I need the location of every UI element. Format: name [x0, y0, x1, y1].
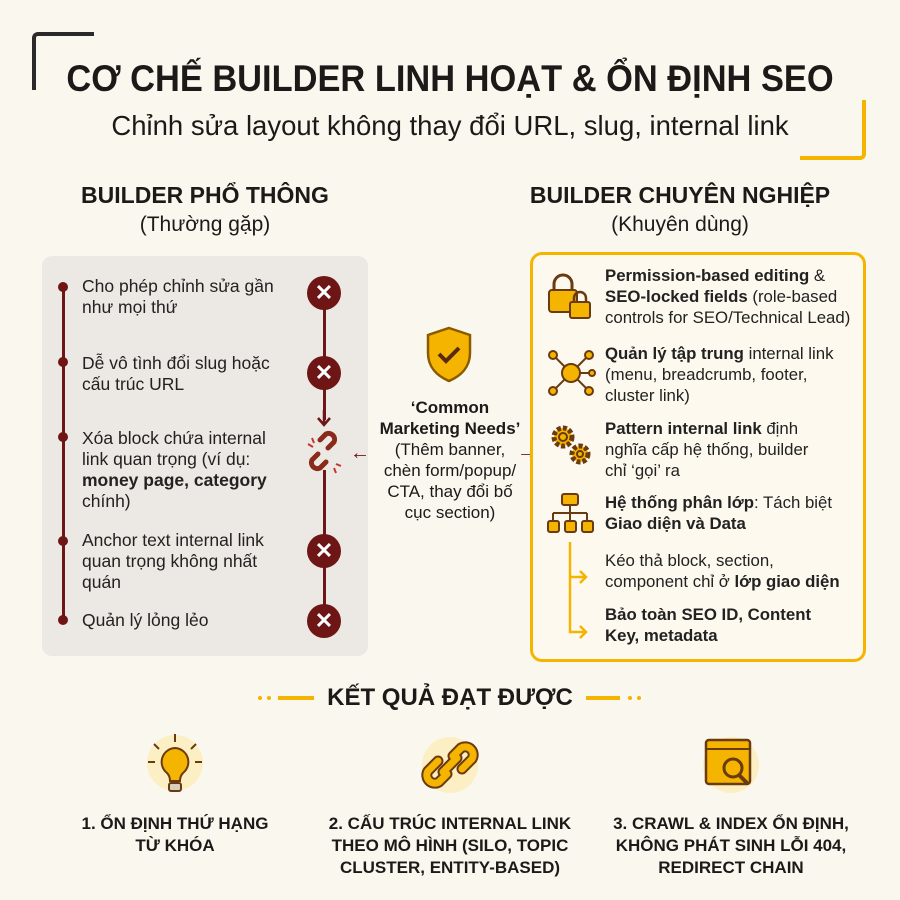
arrow left: ← — [350, 442, 370, 464]
text: Key, metadata — [605, 626, 718, 645]
text: Quản lý tập trung internal link — [605, 344, 833, 363]
left items: quán — [82, 572, 121, 592]
section heading: ket qua: KẾT QUẢ ĐẠT ĐƯỢC — [327, 684, 573, 711]
result 2 — [329, 737, 571, 877]
icon: hierarchy — [547, 493, 594, 533]
timeline line — [62, 285, 65, 621]
x icons column: ✕ — [315, 360, 333, 385]
left items: Cho phép chỉnh sửa gần — [82, 276, 274, 296]
panel: builder chuyen nghiep — [530, 252, 866, 662]
icon: bulb — [147, 734, 203, 792]
result 2: CLUSTER, ENTITY-BASED) — [340, 858, 560, 877]
left items: quan trọng không nhất — [82, 551, 257, 571]
x icons column — [307, 276, 342, 638]
left items: Dễ vô tình đổi slug hoặc — [82, 353, 270, 373]
result 1: TỪ KHÓA — [135, 836, 215, 855]
corner bracket bottom-right — [800, 100, 866, 160]
left items: link quan trọng (ví dụ: — [82, 449, 250, 469]
icon: chain link — [421, 737, 479, 793]
text: Permission-based editing & — [605, 266, 825, 285]
left items: Anchor text internal link — [82, 530, 264, 550]
icon: locks — [548, 274, 591, 319]
result 2: 2. CẤU TRÚC INTERNAL LINK — [329, 814, 571, 833]
corner bracket top-left — [32, 32, 94, 90]
connector arrows — [568, 542, 588, 639]
center text: common marketing needs: cục section) — [405, 503, 495, 522]
center text: common marketing needs — [380, 398, 520, 522]
left items: Quản lý lỏng lẻo — [82, 610, 208, 630]
center text: common marketing needs: CTA, thay đổi bố — [387, 482, 513, 501]
left items — [58, 276, 274, 630]
text: Pattern internal link định — [605, 419, 798, 438]
result 1: 1. ỔN ĐỊNH THỨ HẠNG — [82, 814, 268, 833]
icon: browser search — [703, 737, 759, 793]
x icons column: ✕ — [315, 538, 333, 563]
heading right: BUILDER CHUYÊN NGHIỆP — [530, 182, 830, 208]
result 3 — [613, 737, 849, 877]
text: Hệ thống phân lớp: Tách biệt — [605, 493, 832, 512]
center text: common marketing needs: (Thêm banner, — [395, 440, 505, 459]
left items: như mọi thứ — [82, 297, 177, 317]
text: controls for SEO/Technical Lead) — [605, 308, 850, 327]
heading left: BUILDER PHỔ THÔNG — [81, 182, 329, 208]
subtitle: Chỉnh sửa layout không thay đổi URL, slug, internal link — [111, 110, 789, 141]
text: chỉ ‘gọi’ ra — [605, 461, 680, 480]
title: CƠ CHẾ BUILDER LINH HOẠT & ỔN ĐỊNH SEO — [66, 58, 834, 99]
section heading: ket qua — [258, 683, 641, 711]
text: component chỉ ở lớp giao diện — [605, 572, 840, 591]
right items — [547, 274, 596, 639]
result 1 — [82, 734, 268, 855]
text: Giao diện và Data — [605, 514, 746, 533]
result 3: KHÔNG PHÁT SINH LỖI 404, — [616, 836, 846, 855]
text: cluster link) — [605, 386, 690, 405]
icon: gears — [552, 426, 590, 464]
left items: chính) — [82, 491, 131, 511]
x icons column: ✕ — [315, 280, 333, 305]
text: Kéo thả block, section, — [605, 551, 774, 570]
left items: money page, category — [82, 470, 267, 490]
center text: common marketing needs: ‘Common — [411, 398, 489, 417]
text: (menu, breadcrumb, footer, — [605, 365, 807, 384]
icon: broken link — [308, 410, 342, 474]
heading left — [81, 182, 329, 236]
arrow right: → — [517, 441, 537, 463]
center text: common marketing needs: chèn form/popup/ — [384, 461, 516, 480]
heading right — [530, 182, 830, 236]
text: Bảo toàn SEO ID, Content — [605, 605, 811, 624]
panel: builder pho thong — [42, 256, 368, 656]
icon: network — [548, 350, 596, 396]
center text: common marketing needs: Marketing Needs’ — [380, 419, 520, 438]
left items: Xóa block chứa internal — [82, 428, 266, 448]
icon: shield — [426, 326, 472, 382]
result 2: THEO MÔ HÌNH (SILO, TOPIC — [332, 836, 568, 855]
result 3: 3. CRAWL & INDEX ỔN ĐỊNH, — [613, 814, 849, 833]
text: SEO-locked fields (role-based — [605, 287, 837, 306]
result 3: REDIRECT CHAIN — [658, 858, 804, 877]
text: nghĩa cấp hệ thống, builder — [605, 440, 808, 459]
left items: cấu trúc URL — [82, 374, 184, 394]
heading right: (Khuyên dùng) — [611, 213, 749, 236]
x icons column: ✕ — [315, 608, 333, 633]
heading left: (Thường gặp) — [140, 213, 270, 236]
